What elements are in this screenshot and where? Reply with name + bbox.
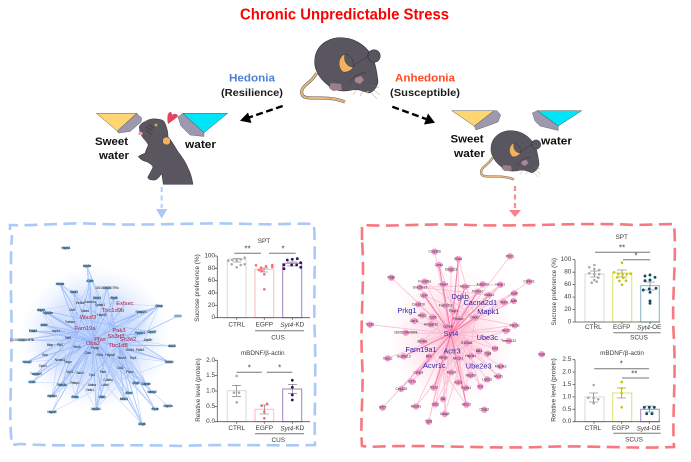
highlighted genes: susceptible: Dgkb: [452, 292, 469, 301]
node labels: susceptible: Fam171b: [439, 304, 453, 308]
node labels: resilience: Dlg4: [139, 422, 146, 426]
icon: anhedonia water bowl: [532, 111, 582, 130]
highlighted genes: susceptible: Prkg1: [397, 306, 417, 315]
node labels: resilience: Camk2a: [84, 300, 96, 304]
node labels: resilience: Ldhb: [101, 383, 109, 387]
chart: SPT resilience: CUS: [271, 334, 285, 342]
highlighted genes: resilience: Exfsec: [116, 301, 134, 307]
chart: mBDNF resilience: CUS: [272, 437, 285, 444]
node labels: resilience: Hsp90: [97, 313, 107, 317]
node labels: resilience: Prdx2: [136, 348, 144, 352]
node labels: resilience: Gnb1: [86, 388, 94, 392]
chart: mBDNF resilience: EGFP: [256, 425, 273, 432]
chart: SPT resilience: CTRL: [228, 322, 245, 328]
node labels: resilience: Eef1a: [76, 301, 84, 305]
chart: SPT resilience: 100: [204, 252, 215, 260]
chart: SPT susceptible: SPT: [615, 234, 628, 241]
highlighted genes: resilience: Pak3: [112, 328, 126, 334]
label: Hedonia: [221, 72, 283, 99]
highlighted genes: susceptible: [397, 292, 499, 370]
node labels: susceptible: Klc3: [492, 347, 498, 351]
node labels: susceptible: Ogal: [484, 352, 491, 356]
title: Chronic Unpredictable Stress: [240, 6, 449, 24]
node labels: resilience: Nsf: [100, 395, 105, 399]
chart: mBDNF susceptible: Syt4-OE: [637, 425, 661, 432]
label: anhedonia sweet water: water: [453, 148, 486, 160]
icon: rearing mouse drinking: [138, 119, 193, 184]
node labels: susceptible: Thop1: [449, 309, 458, 313]
node labels: resilience: Gapdh: [141, 382, 151, 386]
chart: SPT susceptible: SCUS: [630, 334, 648, 342]
highlighted genes: resilience: Pfas: [94, 337, 106, 343]
extra dense edges: resilience: [22, 266, 178, 424]
label: hedonia sweet water: [95, 136, 130, 162]
highlighted genes: resilience: Tbc1d8: [108, 343, 128, 349]
chart: mBDNF resilience: Relative level (protein): [195, 358, 202, 422]
node labels: susceptible: Hdac4: [439, 282, 448, 286]
node labels: susceptible: Slc28a13: [397, 354, 411, 358]
highlighted genes: susceptible: Acvr1c: [423, 361, 446, 370]
chart: mBDNF resilience: 0.5: [206, 403, 215, 410]
node labels: resilience: Atp2b1: [91, 407, 101, 411]
node labels: resilience: Tpi1: [89, 373, 95, 377]
chart: mBDNF susceptible: *: [620, 360, 623, 368]
chart: mBDNF susceptible: 2.0: [562, 369, 572, 376]
node labels: susceptible: Mocs2: [460, 285, 470, 289]
edges: susceptible: [370, 252, 529, 422]
chart: SPT susceptible: 20: [564, 306, 572, 313]
node labels: resilience: Rab3a: [57, 383, 67, 387]
node labels: resilience: Ncam1: [55, 358, 65, 362]
nodes: susceptible: [370, 252, 542, 422]
node labels: resilience: Pkm: [100, 370, 107, 374]
chart: mBDNF susceptible: CTRL: [585, 425, 602, 432]
chart: SPT susceptible: 40: [564, 294, 572, 301]
edges: resilience: [22, 266, 178, 424]
node labels: resilience: Cox5a: [103, 378, 113, 382]
node labels: susceptible: Slc6a1: [484, 293, 494, 297]
node labels: susceptible: Cbsp2: [480, 408, 489, 412]
chart: SPT resilience: 20: [208, 302, 215, 309]
arrow: down to susceptible panel: [509, 186, 521, 217]
panel: resilience: [10, 223, 315, 446]
node labels: susceptible: Cmy2b6: [429, 250, 441, 254]
node labels: resilience: Atp6v1: [47, 394, 57, 398]
node labels: susceptible: Cyb5: [429, 315, 437, 319]
node labels: resilience: Ppia: [152, 407, 158, 411]
node labels: susceptible: Tcp62: [366, 323, 375, 327]
node labels: susceptible: Bkt1: [476, 349, 482, 353]
label: Anhedonia: (Susceptible): [390, 87, 460, 99]
node labels: susceptible: Oas1c: [383, 356, 393, 360]
node labels: susceptible: Kcn3: [455, 380, 462, 384]
node labels: susceptible: Casp3: [440, 412, 450, 416]
label: hedonia water: water: [184, 139, 217, 151]
chart: SPT resilience: 60: [208, 277, 215, 284]
node labels: resilience: Atp5e: [83, 264, 91, 268]
node labels: resilience: Cap2a: [163, 404, 173, 408]
chart: mBDNF susceptible: 1.0: [562, 393, 572, 400]
node labels: resilience: Mbp: [47, 343, 53, 347]
node labels: susceptible: Lrpj4: [420, 293, 428, 297]
highlighted genes: resilience: Sh3a2: [120, 337, 136, 343]
chart: SPT susceptible: Syt4-OE: [637, 324, 661, 331]
node labels: susceptible: Pcdh10: [472, 290, 483, 294]
node labels: resilience: Trappc9: [30, 372, 42, 376]
chart: mBDNF resilience: 1.5: [206, 372, 215, 379]
highlighted genes: susceptible: Ube3c: [477, 333, 498, 342]
node labels: susceptible: [366, 250, 545, 424]
node labels: susceptible: Fundc8a: [418, 280, 431, 284]
node labels: resilience: Vamp2: [147, 390, 157, 394]
panel border: susceptible dashed: [361, 224, 675, 448]
node labels: susceptible: Hsap1: [496, 283, 505, 287]
node labels: susceptible: Cdnk2c: [523, 280, 535, 284]
node labels: resilience: Hspb1: [61, 246, 71, 250]
node labels: resilience: 1810030O07Rik: [95, 286, 119, 290]
chart: mBDNF susceptible: 0.5: [562, 406, 572, 413]
chart: mBDNF susceptible: EGFP: [612, 425, 629, 432]
chart: SPT susceptible: Sucrose preference (%): [551, 258, 558, 325]
node labels: susceptible: Slc4a8: [417, 339, 428, 343]
node labels: susceptible: Dock7: [470, 316, 480, 320]
node labels: resilience: Tuba1: [80, 309, 90, 313]
node labels: resilience: Atp5b: [144, 338, 152, 342]
node labels: susceptible: Cpne8: [443, 325, 453, 329]
node labels: susceptible: Rhb: [426, 355, 432, 359]
node labels: susceptible: Abcc3: [462, 403, 471, 407]
chart: SPT susceptible: CTRL: [585, 324, 602, 331]
node labels: susceptible: Lgi2p1: [482, 377, 492, 381]
node labels: resilience: Ywhaz: [65, 320, 75, 324]
node labels: susceptible: Abcc1: [418, 313, 427, 317]
network: resilience: [10, 246, 180, 426]
node labels: resilience: Snap25: [135, 310, 147, 314]
label: Hedonia: Hedonia: [229, 72, 276, 84]
node labels: susceptible: Zadh: [511, 291, 518, 295]
node labels: resilience: Sptan1: [95, 303, 105, 307]
node labels: susceptible: Tcp5c1: [461, 386, 471, 390]
chart: SPT susceptible: **: [619, 244, 625, 252]
label: Hedonia: (Resilience): [221, 87, 283, 99]
node labels: susceptible: 1810010A06Rik: [394, 331, 418, 335]
chart: mBDNF resilience: 0.0: [206, 418, 215, 425]
icon: heart: [167, 112, 178, 124]
node labels: resilience: Pam: [72, 395, 79, 399]
highlighted genes: susceptible: Cacna2d1: [463, 298, 497, 307]
highlighted genes: resilience: Wasf3: [80, 315, 96, 321]
chart: SPT susceptible: *: [634, 252, 638, 260]
chart: SPT resilience: 40: [208, 290, 215, 296]
chart: mBDNF susceptible: SCUS: [625, 436, 643, 444]
node labels: susceptible: Wdr4: [500, 300, 508, 304]
node labels: resilience: Ckb: [69, 308, 75, 312]
node labels: susceptible: Tmem212: [501, 339, 516, 343]
label: Anhedonia: Anhedonia: [395, 72, 456, 84]
label: anhedonia sweet water: Sweet: [450, 134, 484, 146]
node labels: susceptible: Sox: [477, 385, 483, 389]
label: hedonia sweet water: Sweet: [95, 136, 128, 148]
node labels: resilience: Nrgn: [64, 360, 72, 364]
node labels: resilience: Hspa8: [105, 353, 115, 357]
chart: SPT resilience: Syt4-KD: [280, 322, 305, 328]
chart: mBDNF resilience: [195, 350, 310, 444]
node labels: susceptible: Cep125: [396, 387, 407, 391]
node labels: resilience: Actb: [41, 323, 47, 327]
chart: mBDNF susceptible: mBDNF/β-actin: [600, 350, 644, 357]
node labels: resilience: Gad1: [70, 290, 78, 294]
label: anhedonia sweet water: [450, 134, 486, 160]
chart: mBDNF resilience: *: [248, 364, 251, 372]
arrow: to hedonia: [240, 106, 283, 123]
chart: SPT susceptible: 100: [561, 256, 572, 263]
node labels: susceptible: Apln: [510, 299, 517, 303]
node labels: susceptible: Herc5: [502, 329, 511, 333]
highlighted genes: resilience: Tbc1d9b: [102, 308, 124, 314]
chart: mBDNF susceptible: 0.0: [562, 418, 572, 425]
node labels: resilience: Thy1: [129, 356, 137, 360]
arrow: down to resilience panel: [156, 187, 167, 218]
node labels: resilience: Sncb: [73, 345, 81, 349]
node labels: susceptible: Syngp: [439, 355, 448, 359]
node labels: resilience: Pebp1: [70, 381, 80, 385]
chart: mBDNF susceptible: [550, 350, 661, 444]
node labels: resilience: Sdc3: [76, 371, 84, 375]
node labels: susceptible: Nlrc3-1: [453, 356, 464, 360]
node labels: resilience: Gfap: [155, 304, 163, 308]
chart: SPT susceptible: 60: [564, 281, 572, 288]
chart: SPT resilience: SPT: [258, 238, 270, 245]
chart: mBDNF resilience: CTRL: [228, 425, 245, 432]
node labels: resilience: Gria1: [93, 296, 101, 300]
node labels: susceptible: Ncl8: [538, 352, 545, 356]
node labels: resilience: Uchl1: [126, 348, 134, 352]
node labels: susceptible: Cenp3: [413, 370, 423, 374]
chart: mBDNF resilience: 1.0: [206, 388, 215, 394]
strong edges: susceptible: [404, 259, 489, 405]
nodes: resilience: [20, 248, 180, 424]
chart: mBDNF resilience: *: [278, 364, 281, 372]
node labels: resilience: Eno: [126, 391, 132, 395]
node labels: resilience: Gpr37: [147, 330, 157, 334]
chart: mBDNF susceptible: 1.5: [562, 381, 572, 388]
node labels: resilience: Stmn1: [117, 356, 127, 360]
chart: SPT resilience: *: [281, 244, 285, 254]
node labels: resilience: Cplx1: [39, 364, 47, 368]
label: anhedonia water: water: [540, 136, 573, 148]
chart: SPT susceptible: EGFP: [613, 324, 630, 331]
chart: SPT susceptible: [551, 234, 661, 342]
label: Anhedonia: [390, 72, 460, 99]
highlighted genes: resilience: [74, 301, 136, 349]
panel border: resilience dashed: [10, 223, 315, 446]
node labels: resilience: C130074G19Rik: [10, 338, 35, 342]
chart: SPT resilience: 0: [211, 314, 215, 321]
node labels: resilience: Aldoa: [88, 383, 96, 387]
node labels: susceptible: Mop50: [466, 373, 476, 377]
highlighted genes: resilience: Sh3rf3: [107, 334, 125, 340]
node labels: susceptible: Dnajc13: [445, 267, 457, 271]
node labels: resilience: Mdh1: [120, 397, 128, 401]
node labels: susceptible: Prkacb: [453, 317, 464, 321]
node labels: susceptible: Hsp3s1: [465, 354, 476, 358]
node labels: susceptible: Ptpjh: [388, 276, 395, 280]
node labels: susceptible: Grb2: [432, 402, 439, 406]
highlighted genes: resilience: Oba2: [86, 341, 100, 347]
chart: mBDNF resilience: mBDNF/β-actin: [241, 350, 285, 357]
arrow: to anhedonia: [392, 107, 435, 124]
chart: mBDNF resilience: 2.0: [206, 357, 215, 364]
node labels: susceptible: Fam3c: [510, 323, 520, 327]
inner nodes: resilience: [42, 302, 150, 390]
node labels: resilience: Ndufa: [56, 282, 65, 286]
node labels: susceptible: Adam30: [477, 282, 489, 286]
chart: mBDNF susceptible: 2.5: [562, 356, 572, 363]
highlighted genes: susceptible: Actr3: [443, 346, 461, 356]
chart: SPT susceptible: 0: [568, 318, 572, 326]
node labels: resilience: Ctsd: [85, 351, 92, 355]
icon: hunched mouse: [481, 131, 541, 180]
chart: mBDNF susceptible: Relative level (protein): [550, 358, 558, 422]
highlighted genes: susceptible: Syt4: [444, 329, 458, 338]
highlighted genes: susceptible: Ube2e3: [466, 362, 492, 370]
node labels: resilience: Dbt: [29, 380, 35, 384]
node labels: susceptible: S100a5: [461, 341, 473, 345]
node labels: resilience: Syn1: [66, 370, 74, 374]
node labels: resilience: Nefl: [65, 336, 71, 340]
node labels: resilience: Aqp4: [37, 308, 45, 312]
node labels: susceptible: Cmc1: [435, 263, 443, 267]
node labels: susceptible: Gz7a: [408, 380, 416, 384]
node labels: susceptible: Kif27: [379, 406, 387, 410]
icon: central stressed mouse: [302, 38, 380, 102]
chart: SPT resilience: Sucrose preference (%): [194, 254, 201, 322]
node labels: resilience: Ptprz: [126, 370, 134, 374]
node labels: susceptible: Map3k2: [495, 364, 507, 368]
node labels: resilience: Atp1a: [52, 329, 60, 333]
node labels: susceptible: Abcd1: [494, 374, 503, 378]
chart: SPT resilience: EGFP: [256, 322, 273, 328]
icon: anhedonia sweet water bowl: [452, 111, 501, 130]
icon: hedonia sweet water bowl: [96, 113, 142, 133]
edge haze: susceptible: [386, 264, 518, 408]
node labels: susceptible: Ehd4: [454, 257, 462, 261]
node labels: resilience: Cst3: [117, 366, 124, 370]
node labels: resilience: Pdia3: [29, 329, 37, 333]
node labels: resilience: Hspa5: [47, 410, 57, 414]
chart: mBDNF susceptible: **: [631, 370, 637, 378]
node labels: resilience: Cltb: [87, 279, 93, 283]
chart: SPT resilience: 80: [208, 265, 215, 272]
node labels: susceptible: Cux3d10: [412, 302, 425, 306]
network: susceptible: [366, 250, 545, 424]
highlighted genes: susceptible: Mapk1: [477, 307, 499, 316]
node labels: resilience: Ank2: [168, 344, 176, 348]
chart: mBDNF resilience: Syt4-KD: [280, 425, 305, 432]
icon: hedonia water bowl: [178, 113, 228, 136]
node labels: resilience: Cnp: [42, 353, 48, 357]
node labels: resilience: [10, 246, 176, 426]
node labels: resilience: Ppp1r1: [135, 331, 145, 335]
chart: SPT resilience: [194, 238, 310, 342]
edge haze: resilience: [19, 266, 171, 410]
panel: susceptible: [361, 224, 675, 448]
node labels: resilience: Tubb4: [164, 360, 174, 364]
highlighted genes: susceptible: Fam19a1: [405, 345, 437, 354]
node labels: susceptible: Arhgap32: [424, 322, 438, 326]
node labels: susceptible: Kcnc4: [447, 370, 456, 374]
highlighted genes: resilience: Fam19a: [74, 326, 96, 332]
node labels: susceptible: Ntl: [441, 397, 445, 401]
chart: SPT resilience: **: [244, 244, 251, 254]
node labels: susceptible: Ndufs1: [411, 404, 421, 408]
node labels: resilience: Rtn1: [97, 353, 104, 357]
node labels: susceptible: Snx25x15: [413, 285, 427, 289]
label: hedonia sweet water: water: [98, 150, 130, 162]
node labels: resilience: Rpl3: [111, 296, 118, 300]
node labels: resilience: Plp1: [57, 343, 63, 347]
node labels: resilience: Kcnq3: [22, 360, 32, 364]
chart: SPT susceptible: 80: [564, 269, 572, 276]
node labels: susceptible: Plch1: [506, 254, 514, 258]
node labels: susceptible: Tgd1: [425, 420, 433, 424]
node labels: resilience: Syp: [133, 381, 139, 385]
node labels: susceptible: Gar11: [410, 319, 419, 323]
node labels: resilience: Myo5a: [43, 311, 53, 315]
node labels: resilience: Psap: [91, 346, 99, 350]
node labels: susceptible: Tcen1: [430, 386, 439, 390]
